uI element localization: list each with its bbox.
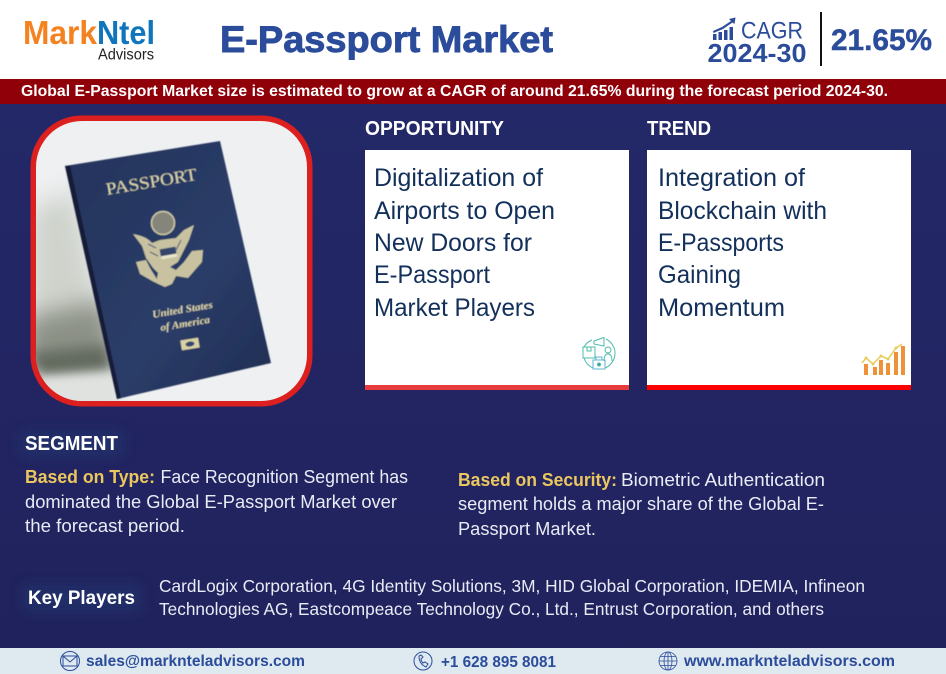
- phone number: +1 628 895 8081: [441, 654, 556, 671]
- segment: based on type: Based on Type:: [25, 467, 155, 487]
- segment: based on type: the forecast period.: [25, 516, 185, 536]
- CAGR block: 2024-30: [708, 40, 806, 68]
- logo: MarkNtel Advisors: Ntel: [97, 14, 155, 51]
- opportunity text: [374, 164, 555, 322]
- segment: based on security: segment holds a major share of the Global E-: [458, 494, 824, 514]
- icon: growth chart: [713, 18, 736, 40]
- trend text: Momentum: [658, 294, 785, 322]
- icon: globe: [659, 652, 677, 670]
- opportunity text: Market Players: [374, 294, 535, 322]
- panel: opportunity: [365, 150, 629, 390]
- opportunity text: Digitalization of: [374, 164, 543, 192]
- passport book: [65, 141, 271, 399]
- passport cover text: United States: [152, 300, 214, 321]
- segment: based on security: Biometric Authentication: [621, 470, 825, 490]
- logo: MarkNtel Advisors: [23, 14, 155, 64]
- passport photo panel: [25, 118, 310, 410]
- icon: email: [60, 652, 80, 670]
- CAGR block: 21.65%: [831, 24, 932, 57]
- passport chip symbol: [180, 338, 200, 350]
- trend text: [658, 164, 827, 322]
- trend text: E-Passports: [658, 229, 784, 257]
- website: www.marknteladvisors.com: [683, 653, 895, 670]
- icon: phone: [414, 652, 432, 670]
- CAGR block: CAGR: [741, 18, 803, 44]
- key players list: [159, 576, 865, 619]
- trend text: Blockchain with: [658, 197, 827, 225]
- CAGR block: [708, 12, 932, 68]
- key players label: Key Players: [28, 587, 135, 609]
- summary banner: Global E-Passport Market size is estimated to grow at a CAGR of around 21.65% during the forecast period 2024-30.: [21, 83, 888, 100]
- title: E-Passport Market: [220, 19, 553, 60]
- segment: based on security: Passport Market.: [458, 519, 596, 539]
- summary banner: [0, 79, 946, 104]
- opportunity text: Airports to Open: [374, 197, 555, 225]
- panel: trend: [647, 150, 911, 390]
- footer contact bar: [0, 648, 946, 674]
- logo: MarkNtel Advisors: Advisors: [98, 46, 154, 64]
- trend text: Gaining: [658, 261, 741, 289]
- heading: trend: TREND: [647, 118, 711, 140]
- opportunity text: E-Passport: [374, 261, 490, 289]
- segment: based on type: dominated the Global E-Passport Market over: [25, 492, 397, 512]
- icon: digital airport: [583, 338, 615, 369]
- heading: segment: SEGMENT: [25, 433, 118, 455]
- key players list: Technologies AG, Eastcompeace Technology Co., Ltd., Entrust Corporation, and others: [159, 599, 824, 619]
- passport eagle emblem: [133, 212, 203, 287]
- segment: based on type: Face Recognition Segment has: [160, 467, 408, 487]
- header band: [0, 0, 946, 79]
- passport cover text: PASSPORT: [104, 164, 199, 199]
- passport cover text: [104, 164, 214, 334]
- segment: based on security: Based on Security:: [458, 470, 617, 490]
- segment: based on type: [25, 467, 408, 536]
- key players list: CardLogix Corporation, 4G Identity Solutions, 3M, HID Global Corporation, IDEMIA, Infineon: [159, 576, 865, 596]
- trend text: Integration of: [658, 164, 805, 192]
- heading: opportunity: OPPORTUNITY: [365, 118, 505, 140]
- email address: sales@marknteladvisors.com: [86, 653, 305, 670]
- segment: based on security: [458, 470, 825, 539]
- passport cover text: of America: [160, 315, 211, 334]
- opportunity text: New Doors for: [374, 229, 532, 257]
- logo: MarkNtel Advisors: Mark: [23, 14, 98, 51]
- icon: rising bars: [862, 344, 905, 375]
